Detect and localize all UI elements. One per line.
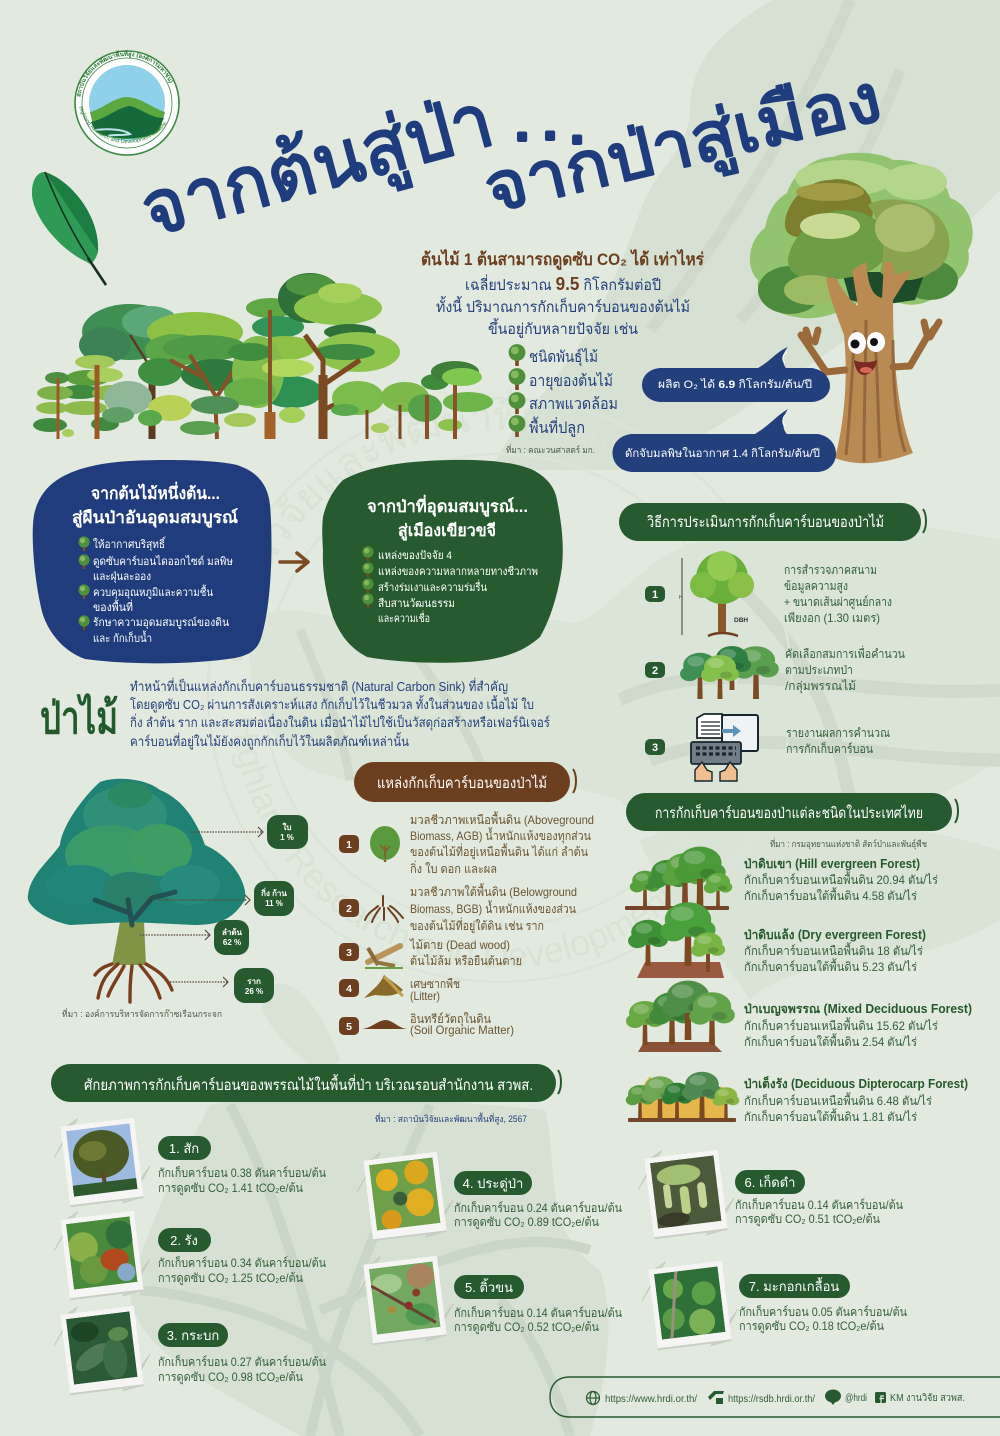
step 1: field survey: ข้อมูลความสูง: [784, 579, 848, 594]
species 3: krabak: กักเก็บคาร์บอน 0.27 ตันคาร์บอน/ต้น: [158, 1354, 326, 1369]
panel: from forest: แหล่งของปัจจัย 4: [378, 550, 452, 562]
list: factors: อายุของต้นไม้: [529, 372, 613, 391]
footer: contact links: [550, 1377, 1000, 1417]
step 2: select equations: /กลุ่มพรรณไม้: [785, 679, 856, 694]
species 6: ket dam: 6. เก็ดดำ: [745, 1173, 795, 1190]
source: forest type: ที่มา : กรมอุทยานแห่งชาติ สัตว์ป่าและพันธุ์พืช: [770, 837, 927, 850]
panel: from forest: สืบสานวัฒนธรรม: [378, 597, 455, 610]
forest type: deciduous dipterocarp: กักเก็บคาร์บอนใต้พื้นดิน 1.81 ตัน/ไร่: [744, 1108, 918, 1124]
forest type: dry evergreen: กักเก็บคาร์บอนใต้พื้นดิน 5.23 ตัน/ไร่: [744, 958, 918, 974]
illustration: tree carbon distribution: ที่มา : องค์การบริหารจัดการก๊าซเรือนกระจก: [62, 1007, 222, 1019]
step 1: field survey: + ขนาดเส้นผ่าศูนย์กลาง: [784, 595, 892, 610]
logo: สถาบันวิจัยและพัฒนาพื้นที่สูง (องค์การมหาชน): [77, 50, 173, 97]
panel: from forest: และความเชื่อ: [378, 610, 430, 625]
footer: contact links: https://www.hrdi.or.th/: [605, 1394, 697, 1405]
forest type: mixed deciduous: กักเก็บคาร์บอนใต้พื้นดิน 2.54 ตัน/ไร่: [744, 1033, 918, 1049]
text: intro: ทั้งนี้ ปริมาณการกักเก็บคาร์บอนของต้นไม้: [436, 296, 690, 316]
species 4: pterocarpus: [357, 1152, 622, 1242]
step 1: field survey: H: [679, 595, 683, 601]
species 1: teak: กักเก็บคาร์บอน 0.38 ตันคาร์บอน/ต้น: [158, 1165, 326, 1180]
illustration: tree carbon distribution: 62 %: [223, 938, 241, 947]
icon: facebook: [875, 1392, 886, 1403]
list: factors: ที่มา : คณะวนศาสตร์ มก.: [506, 443, 595, 455]
step 1: field survey: เพียงอก (1.30 เมตร): [784, 611, 880, 625]
pool 3: dead wood: ต้นไม้ล้ม หรือยืนต้นตาย: [410, 954, 522, 968]
step 3: report: รายงานผลการคำนวณ: [786, 726, 890, 740]
panel: from forest: สู่เมืองเขียวขจี: [398, 521, 496, 542]
icon: leaf: [32, 172, 106, 285]
panel: from one tree: จากต้นไม้หนึ่งต้น...: [91, 481, 220, 503]
forest type: dry evergreen: ป่าดิบแล้ง (Dry evergreen Forest): [744, 928, 926, 942]
logo: Highland Research and Development Institute: [79, 106, 166, 144]
title: ...: [516, 100, 583, 153]
illustration: tree character: [750, 153, 973, 463]
watermark seal: Highland Research and Development Institute: [232, 718, 674, 968]
species 7: makok kluean: การดูดซับ CO₂ 0.18 tCO₂e/ต้น: [739, 1319, 884, 1334]
footer: contact links: @hrdi: [845, 1393, 867, 1404]
illustration: tree carbon distribution: กิ่ง ก้าน: [261, 887, 287, 898]
pool 1: aboveground biomass: [339, 811, 594, 876]
heading: species potential: [51, 1064, 561, 1102]
species 1: teak: [54, 1118, 326, 1207]
forest type: mixed deciduous: กักเก็บคาร์บอนเหนือพื้นดิน 15.62 ตัน/ไร่: [744, 1017, 939, 1033]
callout: oxygen: [642, 347, 830, 402]
heading: forest: ป่าไม้: [40, 692, 118, 743]
pool 2: belowground biomass: ของต้นไม้ที่อยู่ใต้ดิน เช่น ราก: [410, 917, 544, 934]
list: factors: พื้นที่ปลูก: [529, 416, 585, 438]
title: [132, 60, 889, 256]
illustration: tree carbon distribution: ราก: [247, 977, 261, 986]
species 2: rang: [54, 1211, 326, 1300]
panel: from one tree: รักษาความอุดมสมบูรณ์ของดิน: [93, 616, 229, 629]
heading: carbon pools: แหล่งกักเก็บคาร์บอนของป่าไม้: [377, 773, 547, 792]
illustration: tree carbon distribution: 1 %: [280, 833, 294, 842]
callout: pollutants: ดักจับมลพิษในอากาศ 1.4 กิโลกรัม/ต้น/ปี: [625, 446, 820, 460]
source: species: ที่มา : สถาบันวิจัยและพัฒนาพื้นที่สูง, 2567: [375, 1112, 527, 1125]
arrow: [280, 553, 308, 571]
step 1: field survey: การสำรวจภาคสนาม: [784, 563, 877, 577]
text: forest description: กิ่ง ลำต้น ราก และสะสมต่อเนื่องในดิน เมื่อนำไม้ไปใช้เป็นวัสดุก่อสร้างหรือเฟอร์นิเจอร์: [130, 713, 550, 731]
forest type: hill evergreen: กักเก็บคาร์บอนเหนือพื้นดิน 20.94 ตัน/ไร่: [744, 871, 939, 887]
title: จากป่าสู่เมือง: [477, 60, 889, 231]
text: intro: [421, 249, 705, 338]
heading: assessment methods: วิธีการประเมินการกักเก็บคาร์บอนของป่าไม้: [647, 512, 884, 531]
pool 5: soil organic matter: 5: [346, 1021, 352, 1033]
species 5: tiew khon: กักเก็บคาร์บอน 0.14 ตันคาร์บอน/ต้น: [454, 1305, 622, 1320]
text: intro: เฉลี่ยประมาณ 9.5 กิโลกรัมต่อปี: [465, 274, 661, 294]
logo: [74, 50, 180, 156]
species 7: makok kluean: กักเก็บคาร์บอน 0.05 ตันคาร์บอน/ต้น: [739, 1304, 907, 1319]
pool 2: belowground biomass: มวลชีวภาพใต้พื้นดิน (Belowground: [410, 883, 577, 899]
text: forest description: คาร์บอนที่อยู่ในไม้ยังคงถูกกักเก็บไว้ในผลิตภัณฑ์เหล่านั้น: [130, 732, 409, 750]
illustration: tree carbon distribution: ใบ: [283, 822, 291, 832]
forest type: deciduous dipterocarp: กักเก็บคาร์บอนเหนือพื้นดิน 6.48 ตัน/ไร่: [744, 1092, 933, 1108]
species 4: pterocarpus: การดูดซับ CO₂ 0.89 tCO₂e/ต้น: [454, 1215, 599, 1230]
callout: oxygen: ผลิต O₂ ได้ 6.9 กิโลกรัม/ต้น/ปี: [658, 377, 812, 391]
panel: from one tree: ดูดซับคาร์บอนไดออกไซด์ มลพิษ: [93, 555, 233, 568]
heading: assessment methods: [619, 503, 926, 541]
pool 1: aboveground biomass: ของต้นไม้ที่อยู่เหนือพื้นดิน ได้แก่ ลำต้น: [410, 843, 588, 860]
forest type: mixed deciduous: [626, 981, 972, 1052]
species 7: makok kluean: [642, 1261, 907, 1350]
species 7: makok kluean: 7. มะกอกเกลื้อน: [749, 1277, 839, 1294]
pool 2: belowground biomass: 2: [346, 903, 352, 915]
panel: from one tree: ของพื้นที่: [93, 599, 133, 614]
text: forest description: ทำหน้าที่เป็นแหล่งกักเก็บคาร์บอนธรรมชาติ (Natural Carbon Sink) ที่สำคัญ: [130, 677, 508, 694]
forest type: dry evergreen: กักเก็บคาร์บอนเหนือพื้นดิน 18 ตัน/ไร่: [744, 942, 924, 958]
species 1: teak: การดูดซับ CO₂ 1.41 tCO₂e/ต้น: [158, 1181, 303, 1196]
species 6: ket dam: [638, 1150, 903, 1239]
panel: from one tree: สู่ผืนป่าอันอุดมสมบูรณ์: [72, 508, 238, 529]
pool 2: belowground biomass: Biomass, BGB) น้ำหนักแห้งของส่วน: [410, 900, 576, 916]
species 2: rang: 2. รัง: [170, 1233, 198, 1248]
pool 4: litter: เศษซากพืช: [410, 977, 460, 991]
panel: from forest: จากป่าที่อุดมสมบูรณ์...: [367, 494, 528, 518]
species 5: tiew khon: การดูดซับ CO₂ 0.52 tCO₂e/ต้น: [454, 1320, 599, 1335]
pool 1: aboveground biomass: Biomass, AGB) น้ำหนักแห้งของทุกส่วน: [410, 827, 591, 844]
illustration: tree carbon distribution: 26 %: [245, 987, 263, 996]
pool 5: soil organic matter: อินทรีย์วัตถุในดิน: [410, 1012, 491, 1027]
watermark seal: [223, 388, 793, 968]
panel: from one tree: และ กักเก็บน้ำ: [93, 630, 152, 645]
pool 3: dead wood: 3: [346, 947, 352, 959]
illustration: tree carbon distribution: ลำต้น: [222, 927, 243, 937]
step 2: select equations: ตามประเภทป่า: [785, 663, 853, 677]
pool 1: aboveground biomass: กิ่ง ใบ ดอก และผล: [410, 860, 497, 876]
species 2: rang: กักเก็บคาร์บอน 0.34 ตันคาร์บอน/ต้น: [158, 1255, 326, 1270]
footer: contact links: KM งานวิจัย สวพส.: [890, 1393, 965, 1404]
panel: from one tree: ควบคุมอุณหภูมิและความชื้น: [93, 584, 213, 599]
callout: pollutants: [612, 409, 836, 472]
icon: database: [708, 1391, 724, 1404]
list: factors: ชนิดพันธุ์ไม้: [529, 348, 598, 367]
pool 5: soil organic matter: [339, 1012, 514, 1037]
panel: from forest: สร้างร่มเงาและความร่มรื่น: [378, 579, 487, 594]
species 1: teak: 1. สัก: [169, 1141, 199, 1156]
pool 4: litter: 4: [346, 983, 352, 995]
panel: from one tree: [33, 460, 271, 663]
icon: globe: [586, 1392, 600, 1404]
panel: from one tree: ให้อากาศบริสุทธิ์: [93, 536, 166, 551]
panel: from forest: [322, 460, 563, 663]
forest type: deciduous dipterocarp: ป่าเต็งรัง (Deciduous Dipterocarp Forest): [744, 1076, 968, 1091]
step 3: report: 3: [652, 742, 658, 754]
pool 3: dead wood: ไม้ตาย (Dead wood): [409, 938, 510, 952]
step 1: field survey: 1: [652, 589, 658, 601]
pool 3: dead wood: [339, 938, 522, 968]
carbon pool list: [339, 811, 594, 1037]
species 3: krabak: การดูดซับ CO₂ 0.98 tCO₂e/ต้น: [158, 1370, 303, 1385]
forest type: mixed deciduous: ป่าเบญจพรรณ (Mixed Deciduous Forest): [744, 1002, 972, 1016]
species 5: tiew khon: [357, 1256, 622, 1345]
forest type: hill evergreen: กักเก็บคาร์บอนใต้พื้นดิน 4.58 ตัน/ไร่: [744, 887, 918, 903]
forest type: hill evergreen: ป่าดิบเขา (Hill evergreen Forest): [744, 857, 920, 871]
species 6: ket dam: กักเก็บคาร์บอน 0.14 ตันคาร์บอน/ต้น: [735, 1197, 903, 1212]
forest type: deciduous dipterocarp: [626, 1072, 968, 1124]
forest type: dry evergreen: [628, 902, 926, 978]
watermark seal: สถาบันวิจัยและพัฒนาพื้นที่สูง: [223, 388, 530, 661]
step 1: field survey: [645, 551, 892, 636]
step 2: select equations: 2: [652, 665, 658, 677]
illustration: tree carbon distribution: [28, 779, 308, 1019]
title: จากต้นสู่ป่า: [132, 78, 503, 256]
step 2: select equations: [645, 645, 905, 699]
species 6: ket dam: การดูดซับ CO₂ 0.51 tCO₂e/ต้น: [735, 1212, 880, 1227]
text: intro: ขึ้นอยู่กับหลายปัจจัย เช่น: [488, 318, 638, 338]
list: factors: [506, 344, 618, 455]
pool 5: soil organic matter: (Soil Organic Matter): [410, 1023, 514, 1037]
heading: carbon by forest type: [626, 793, 958, 831]
species 3: krabak: 3. กระบก: [167, 1328, 219, 1343]
species 4: pterocarpus: กักเก็บคาร์บอน 0.24 ตันคาร์บอน/ต้น: [454, 1200, 622, 1215]
species 2: rang: การดูดซับ CO₂ 1.25 tCO₂e/ต้น: [158, 1271, 303, 1286]
pool 4: litter: [339, 975, 460, 1003]
pool 4: litter: (Litter): [410, 989, 440, 1003]
panel: from one tree: และฝุ่นละออง: [93, 571, 151, 583]
step 3: report: [645, 714, 890, 781]
step 3: report: การกักเก็บคาร์บอน: [786, 741, 873, 756]
icon: line: [825, 1390, 841, 1405]
pool 1: aboveground biomass: 1: [346, 839, 352, 851]
text: forest description: [130, 677, 550, 750]
species 4: pterocarpus: 4. ประดู่ป่า: [463, 1176, 523, 1192]
pool 2: belowground biomass: [339, 883, 577, 934]
text: forest description: โดยดูดซับ CO₂ ผ่านการสังเคราะห์แสง กักเก็บไว้ในชีวมวล ทั้งในส่วนของ เนื้อไม้ ใบ: [130, 695, 534, 713]
footer: contact links: https://rsdb.hrdi.or.th/: [728, 1394, 815, 1405]
forest type: hill evergreen: [625, 847, 939, 910]
step 1: field survey: DBH: [734, 617, 748, 624]
panel: from forest: แหล่งของความหลากหลายทางชีวภาพ: [378, 565, 538, 578]
list: factors: สภาพแวดล้อม: [529, 396, 618, 413]
heading: species potential: ศักยภาพการกักเก็บคาร์บอนของพรรณไม้ในพื้นที่ป่า บริเวณรอบสำนักงาน สวพส.: [84, 1074, 533, 1094]
text: intro: ต้นไม้ 1 ต้นสามารถดูดซับ CO₂ ได้ เท่าไหร่: [421, 249, 705, 271]
illustration: forest: [33, 273, 493, 439]
illustration: tree carbon distribution: 11 %: [265, 899, 283, 908]
heading: carbon pools: [354, 762, 576, 802]
species 3: krabak: [54, 1306, 326, 1395]
pool 1: aboveground biomass: มวลชีวภาพเหนือพื้นดิน (Aboveground: [410, 811, 594, 827]
species 5: tiew khon: 5. ติ้วขน: [465, 1278, 513, 1295]
heading: carbon by forest type: การกักเก็บคาร์บอนของป่าแต่ละชนิดในประเทศไทย: [655, 803, 923, 822]
step 2: select equations: คัดเลือกสมการเพื่อคำนวน: [785, 645, 905, 661]
